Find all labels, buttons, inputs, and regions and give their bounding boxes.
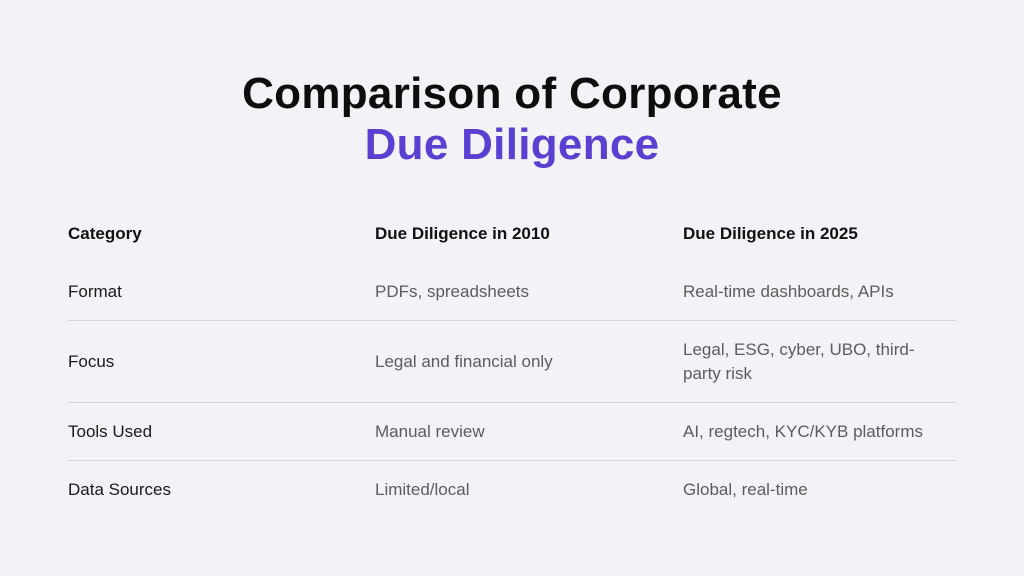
row: tools used: AI, regtech, KYC/KYB platforms	[683, 422, 923, 441]
row: data sources: Limited/local	[375, 480, 470, 499]
row: data sources: Global, real-time	[683, 480, 808, 499]
title: Due Diligence	[365, 120, 659, 169]
row: focus: Focus	[68, 352, 114, 371]
row: data sources	[68, 480, 808, 499]
table header: Category	[68, 224, 142, 243]
table header: Due Diligence in 2010	[375, 224, 550, 243]
table header	[68, 224, 858, 243]
title	[242, 69, 782, 169]
title: Comparison of Corporate	[242, 69, 782, 118]
table header: Due Diligence in 2025	[683, 224, 858, 243]
row: format	[68, 282, 894, 301]
row: tools used: Tools Used	[68, 422, 152, 441]
row: format: Format	[68, 282, 122, 301]
row: focus: Legal and financial only	[375, 352, 553, 371]
row: tools used: Manual review	[375, 422, 485, 441]
row: focus: Legal, ESG, cyber, UBO, third-party risk	[683, 340, 914, 383]
row: focus	[68, 340, 914, 383]
row: tools used	[68, 422, 923, 441]
row: format: Real-time dashboards, APIs	[683, 282, 894, 301]
row: format: PDFs, spreadsheets	[375, 282, 529, 301]
row: data sources: Data Sources	[68, 480, 171, 499]
